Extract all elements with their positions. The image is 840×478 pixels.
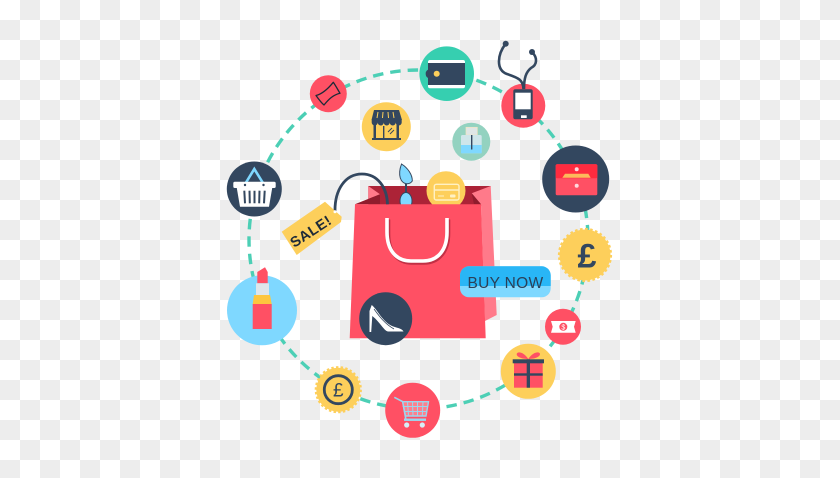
sale tag: SALE! <box>288 213 335 251</box>
icon: wallet <box>419 46 474 101</box>
bag interior <box>368 186 491 206</box>
icon: banknote <box>545 309 581 345</box>
icon: credit card <box>426 171 466 210</box>
icon: large pound badge: £ <box>578 238 597 276</box>
icon: pound coin <box>316 368 360 412</box>
icon: lipstick <box>227 267 297 345</box>
icon: perfume <box>452 123 490 161</box>
icon: red drawer <box>542 146 609 212</box>
icon: high heel <box>359 292 412 345</box>
icon: gift <box>501 344 556 399</box>
sale tag string <box>335 174 388 212</box>
buy now button <box>460 266 551 297</box>
dashed ring <box>249 70 588 409</box>
icon: store <box>362 102 411 151</box>
left flap <box>355 186 380 204</box>
icon: large pound badge <box>560 230 610 280</box>
bag side panel <box>472 186 497 321</box>
icon: shopping basket <box>227 162 282 216</box>
buy now button: BUY NOW <box>468 275 544 292</box>
bag front <box>350 204 486 338</box>
icon: pink note <box>310 75 347 112</box>
icon: sunglasses <box>400 164 412 210</box>
sale tag <box>282 202 342 255</box>
bag handle <box>387 218 448 263</box>
icon: banknote: $ <box>561 324 565 331</box>
icon: phone with earphones <box>499 41 545 128</box>
shopping bag <box>350 164 497 338</box>
icon: shopping cart <box>385 383 440 438</box>
icon: pound coin: £ <box>333 380 344 402</box>
